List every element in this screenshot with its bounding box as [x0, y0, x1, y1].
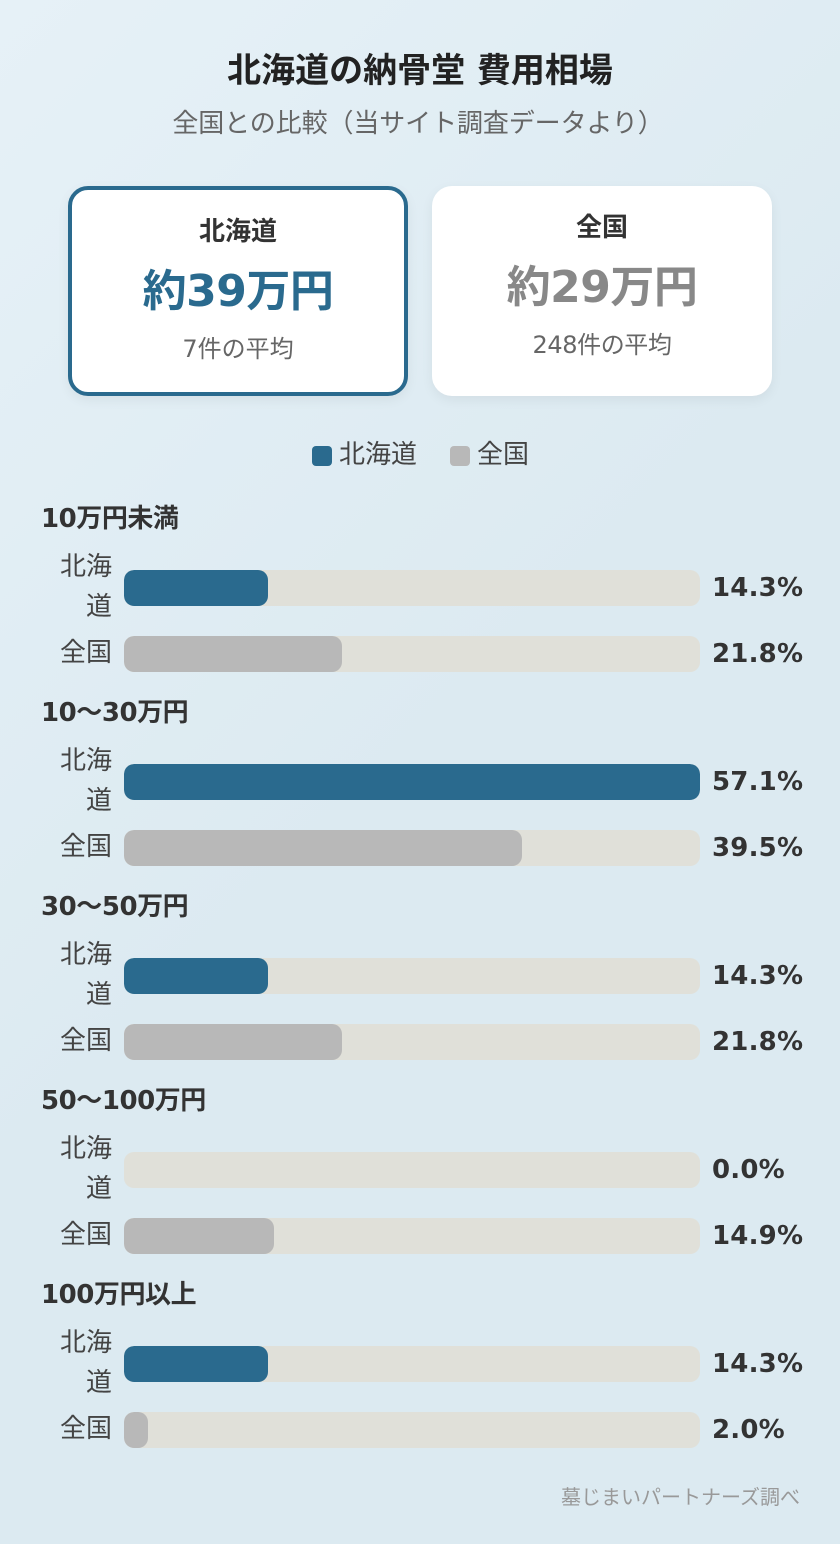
card price: national: 約29万円	[507, 262, 697, 313]
card label: Hokkaido: 北海道	[199, 217, 277, 247]
panel: 300,000 to 500,000 yen	[41, 892, 803, 1060]
bar row: national 14.9%: 全国	[60, 1220, 112, 1250]
bar row: national 21.8%: 全国	[60, 638, 112, 668]
bar row: Hokkaido 0.0%: 0.0%	[712, 1155, 785, 1185]
bar row: national 2.0%: 2.0%	[712, 1415, 785, 1445]
category heading: 50～100万円	[41, 1086, 206, 1116]
bar row: Hokkaido 14.3%: 北海道	[60, 940, 112, 1010]
category heading: 30～50万円	[41, 892, 188, 922]
category heading: 10～30万円	[41, 698, 188, 728]
bar row: national 21.8%	[60, 1024, 803, 1060]
panel: 500,000 to 1,000,000 yen	[41, 1086, 803, 1254]
legend swatch: national	[450, 446, 470, 466]
bar row: national 21.8%: 21.8%	[712, 639, 803, 669]
category heading: 100万円以上	[41, 1280, 196, 1310]
card note: Hokkaido: 7件の平均	[182, 335, 294, 363]
bar row: national 14.9%: 14.9%	[712, 1221, 803, 1251]
legend	[312, 440, 529, 470]
bar row: Hokkaido 0.0%: 北海道	[60, 1134, 112, 1204]
panel: national summary card	[432, 186, 772, 396]
card note: national: 248件の平均	[532, 331, 672, 359]
bar row: Hokkaido 14.3%: 14.3%	[712, 961, 803, 991]
bar row: Hokkaido 14.3%	[60, 940, 803, 1010]
bar row: Hokkaido 57.1%: 北海道	[60, 746, 112, 816]
bar row: Hokkaido 0.0%	[60, 1134, 785, 1204]
panel: Hokkaido summary card	[68, 186, 408, 396]
legend label: Hokkaido: 北海道	[339, 440, 417, 470]
bar row: national 39.5%: 39.5%	[712, 833, 803, 863]
bar row: national 14.9%	[60, 1218, 803, 1254]
panel: 100,000 to 300,000 yen	[41, 698, 803, 866]
bar row: Hokkaido 14.3%: 14.3%	[712, 1349, 803, 1379]
bar row: Hokkaido 14.3%	[60, 552, 803, 622]
bar row: national 2.0%	[60, 1412, 785, 1448]
panel: 1,000,000 yen or more	[41, 1280, 803, 1448]
legend swatch: Hokkaido	[312, 446, 332, 466]
bar row: national 21.8%: 21.8%	[712, 1027, 803, 1057]
bar row: national 39.5%: 全国	[60, 832, 112, 862]
bar row: Hokkaido 14.3%: 北海道	[60, 1328, 112, 1398]
bar row: Hokkaido 57.1%: 57.1%	[712, 767, 803, 797]
panel: under 100,000 yen	[41, 504, 803, 672]
card label: national: 全国	[576, 213, 628, 243]
bar row: Hokkaido 57.1%	[60, 746, 803, 816]
bar row: Hokkaido 14.3%: 14.3%	[712, 573, 803, 603]
bar row: national 21.8%: 全国	[60, 1026, 112, 1056]
source note: 墓じまいパートナーズ調べ	[561, 1485, 800, 1509]
card price: Hokkaido: 約39万円	[143, 266, 333, 317]
title: 北海道の納骨堂 費用相場	[227, 51, 613, 91]
bar row: Hokkaido 14.3%: 北海道	[60, 552, 112, 622]
bar row: national 2.0%: 全国	[60, 1414, 112, 1444]
legend label: national: 全国	[477, 440, 529, 470]
subtitle: 全国との比較（当サイト調査データより）	[172, 109, 664, 139]
category heading: 10万円未満	[41, 504, 178, 534]
bar row: Hokkaido 14.3%	[60, 1328, 803, 1398]
bar row: national 39.5%	[60, 830, 803, 866]
bar row: national 21.8%	[60, 636, 803, 672]
